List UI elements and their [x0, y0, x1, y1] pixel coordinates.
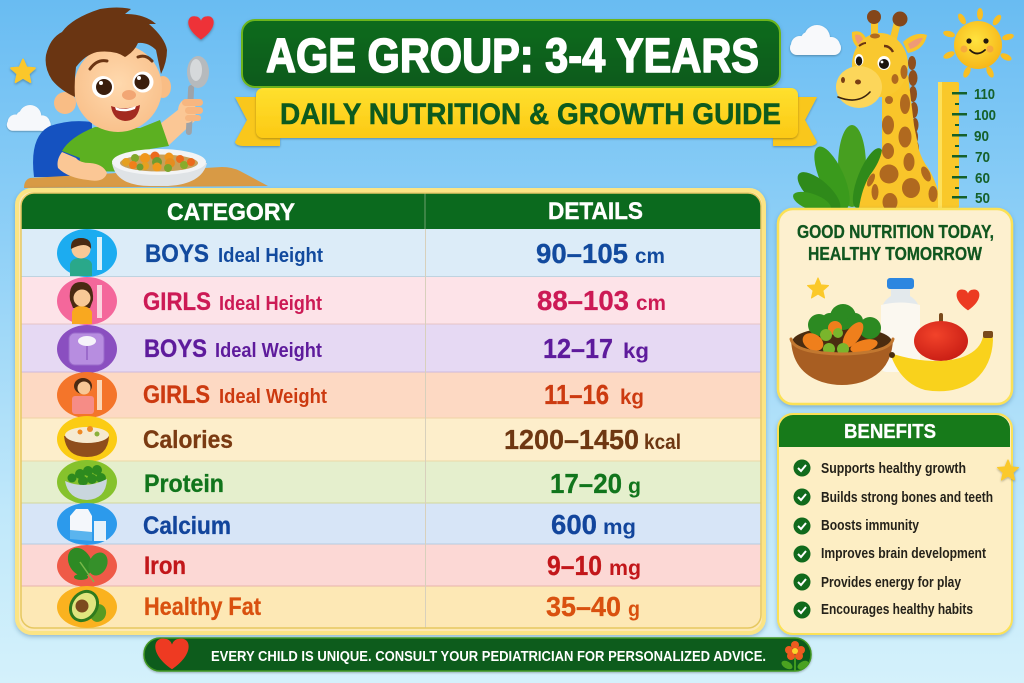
row: boys ideal weight: BOYS — [144, 335, 207, 363]
icon: plant leaves — [790, 125, 889, 218]
icon: vegetable bowl — [791, 304, 893, 385]
icon: heart top — [188, 16, 214, 40]
benefit list: Boosts immunity — [821, 518, 919, 534]
shirt — [62, 120, 169, 172]
row: girls ideal weight: Ideal Weight — [219, 386, 327, 408]
icon: apple — [914, 313, 968, 361]
ears — [54, 92, 76, 114]
benefit list: Provides energy for play — [821, 575, 961, 591]
row: protein: Protein — [144, 470, 224, 498]
row: calories: kcal — [644, 431, 681, 454]
subtitle ribbon — [256, 88, 798, 138]
row: girls ideal height: GIRLS — [143, 288, 211, 316]
ruler numbers: 60 — [975, 170, 990, 187]
icon: star right — [998, 460, 1018, 480]
snout — [841, 77, 845, 83]
row: boys ideal height: 90–105 — [536, 238, 628, 269]
ruler numbers: 110 — [974, 86, 995, 103]
icon: avocado — [57, 584, 117, 628]
table header — [21, 193, 761, 229]
icon: milk bottle — [881, 278, 920, 372]
nose and mouth — [122, 90, 136, 100]
row: calories — [57, 416, 681, 462]
footer text: EVERY CHILD IS UNIQUE. CONSULT YOUR PEDIATRICIAN FOR PERSONALIZED ADVICE. — [211, 649, 766, 665]
left arm — [58, 152, 107, 181]
spoon — [186, 56, 209, 135]
icon: star — [808, 278, 828, 298]
benefit list — [794, 460, 993, 618]
ossicones — [871, 22, 878, 40]
row: calcium: mg — [603, 516, 636, 539]
row: girls ideal weight — [57, 372, 644, 418]
icon: flower — [780, 641, 810, 671]
icon: weighing scale — [57, 325, 117, 373]
row: boys ideal weight: 12–17 — [543, 333, 613, 364]
row: protein — [57, 460, 641, 504]
panel: good nutrition — [778, 209, 1012, 404]
row: boys ideal height — [57, 229, 665, 277]
row: boys ideal weight: kg — [623, 340, 649, 363]
panel: nutrition table — [17, 190, 764, 633]
table rows background — [21, 229, 761, 628]
benefit list: Supports healthy growth — [821, 461, 966, 477]
hand — [178, 99, 203, 123]
row: healthy fat: 35–40 — [546, 591, 621, 622]
row: calories: Calories — [143, 426, 233, 454]
growth ruler — [938, 82, 996, 208]
illustration: giraffe — [836, 10, 941, 211]
icon: cloud left — [7, 105, 51, 131]
row: calcium — [57, 503, 636, 545]
icon: girl with ruler — [57, 277, 117, 325]
icon: peas bowl — [57, 460, 117, 504]
icon: spinach leaves — [57, 544, 117, 587]
icon: boy with ruler — [57, 229, 117, 277]
row: iron: 9–10 — [547, 550, 602, 581]
illustration: boy eating at table — [24, 8, 268, 188]
row: calcium: 600 — [551, 509, 597, 540]
ruler numbers: 70 — [975, 149, 990, 166]
row: boys ideal height: Ideal Height — [218, 245, 323, 267]
row: healthy fat: g — [628, 598, 640, 621]
icon: heart footer — [155, 639, 189, 669]
subtitle text: DAILY NUTRITION & GROWTH GUIDE — [280, 98, 781, 131]
heading: benefits: BENEFITS — [844, 421, 936, 443]
row: girls ideal height — [57, 277, 666, 325]
column heading: category: CATEGORY — [167, 199, 295, 226]
heading: healthy tomorrow: HEALTHY TOMORROW — [808, 244, 982, 264]
icon: milk carton and glass — [57, 503, 117, 545]
row: girls ideal weight: GIRLS — [143, 381, 210, 409]
row: iron: mg — [609, 557, 641, 580]
hair — [46, 8, 167, 97]
row: healthy fat: Healthy Fat — [144, 593, 262, 621]
spots — [865, 34, 938, 211]
icon: sun — [942, 8, 1015, 79]
row: girls ideal height: 88–103 — [537, 285, 629, 316]
column heading: details: DETAILS — [548, 198, 643, 225]
title banner — [242, 20, 780, 87]
ruler numbers: 100 — [974, 107, 996, 124]
benefit list: Encourages healthy habits — [821, 602, 973, 618]
ruler numbers — [974, 86, 996, 207]
icon: food bowl — [57, 416, 117, 462]
benefit list: Builds strong bones and teeth — [821, 490, 993, 506]
row: girls ideal height: Ideal Height — [219, 293, 322, 315]
panel: benefits — [778, 414, 1018, 634]
table — [24, 167, 268, 188]
row: boys ideal height: BOYS — [145, 240, 209, 268]
row: girls ideal height: cm — [636, 292, 666, 315]
icon: cloud right — [790, 25, 841, 55]
footer banner — [144, 638, 811, 671]
row: girls ideal weight: 11–16 — [544, 379, 609, 410]
benefit list: Improves brain development — [821, 546, 986, 562]
face — [74, 44, 162, 132]
row: boys ideal weight: Ideal Weight — [215, 340, 322, 362]
eyes — [90, 56, 154, 98]
mane — [908, 56, 919, 157]
head — [852, 33, 908, 97]
title text: AGE GROUP: 3-4 YEARS — [266, 30, 759, 83]
chair — [33, 121, 92, 177]
benefits header — [779, 415, 1010, 447]
row: protein: 17–20 — [550, 468, 622, 499]
right arm — [160, 106, 198, 146]
row: boys ideal weight — [57, 325, 649, 373]
eyes — [854, 43, 893, 70]
icon: star left — [11, 60, 35, 82]
row: calories: 1200–1450 — [504, 424, 639, 455]
row: healthy fat — [57, 584, 640, 628]
icon: banana — [889, 331, 993, 391]
ruler numbers: 90 — [974, 128, 989, 145]
row: protein: g — [628, 475, 641, 498]
heading: good nutrition today: GOOD NUTRITION TODAY, — [797, 222, 994, 242]
row: boys ideal height: cm — [635, 245, 665, 268]
row: iron — [57, 544, 641, 587]
row: calcium: Calcium — [143, 512, 231, 540]
row: iron: Iron — [144, 552, 186, 580]
body and neck — [859, 75, 941, 208]
icon: heart — [957, 290, 979, 310]
subtitle ribbon tails — [235, 97, 817, 146]
ears — [852, 31, 868, 48]
ruler numbers: 50 — [975, 190, 990, 207]
bowl of food — [112, 149, 207, 186]
icon: girl on scale — [57, 372, 117, 418]
row: girls ideal weight: kg — [620, 386, 644, 409]
